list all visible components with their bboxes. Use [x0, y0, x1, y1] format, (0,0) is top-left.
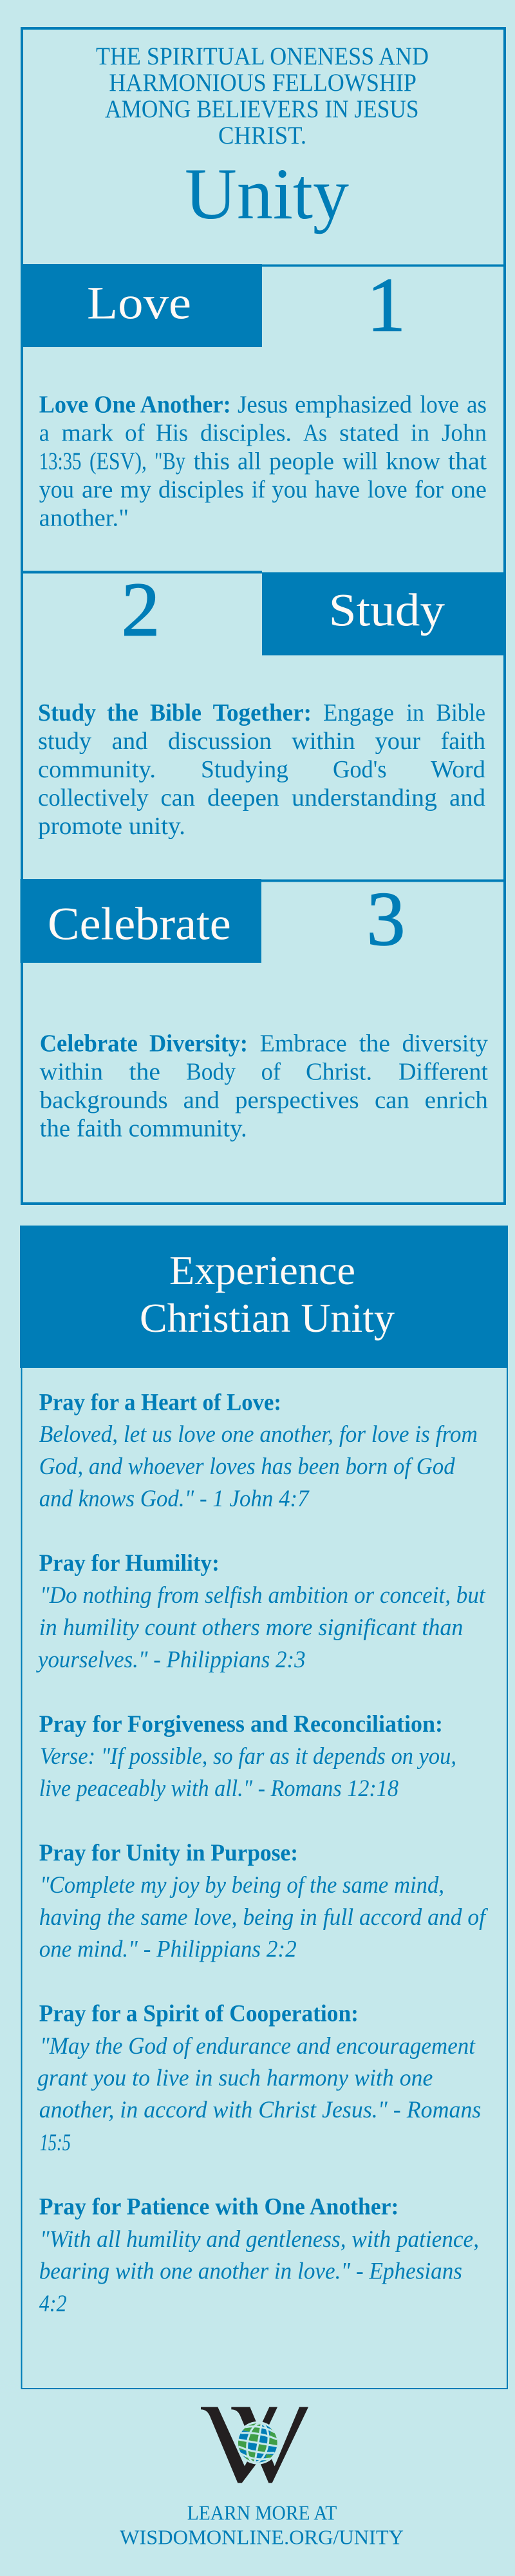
subtitle: AMONG BELIEVERS IN JESUS: [105, 95, 418, 123]
text block: Celebrate Diversity: can: [375, 1087, 409, 1114]
text block: Study the Bible Together: and: [449, 784, 485, 811]
text block: Study the Bible Together: within: [292, 728, 355, 755]
text block: Celebrate Diversity: perspectives: [235, 1087, 359, 1114]
text block: Celebrate Diversity: Different: [398, 1058, 488, 1085]
heading banner: Christian Unity: [140, 1295, 395, 1341]
section 2 header: Study: Study: [329, 585, 445, 636]
prayer: heart of love: Beloved, let us love one another, for love is from: [39, 1421, 478, 1448]
text block: Love One Another: disciples.: [200, 420, 292, 447]
heading banner: [20, 1226, 508, 1368]
text block: Study the Bible Together: understanding: [292, 784, 437, 811]
prayer: unity in purpose: having the same love, being in full accord and of: [39, 1904, 489, 1931]
text block: Study the Bible Together: Together:: [213, 699, 312, 726]
text block: Celebrate Diversity: of: [261, 1058, 281, 1085]
section 3 header: Celebrate: Celebrate: [48, 898, 231, 949]
text block: Celebrate Diversity: Christ.: [306, 1058, 372, 1085]
prayer: patience: Pray for Patience with One Another:: [39, 2193, 398, 2220]
text block: Love One Another: people: [269, 448, 334, 475]
text block: Love One Another: John: [442, 420, 487, 447]
text block: Love One Another: you: [39, 477, 74, 504]
section 2 header: Study: [262, 572, 503, 656]
number 2: 2: [121, 567, 160, 652]
section 1 header: Love: [21, 264, 262, 347]
prayer: forgiveness and reconciliation: Pray for Forgiveness and Reconciliation:: [39, 1711, 443, 1738]
prayer: humility: Pray for Humility:: [39, 1550, 220, 1577]
prayer: spirit of cooperation: another, in accord with Christ Jesus." - Romans: [39, 2097, 481, 2123]
text block: Celebrate Diversity: the: [129, 1058, 160, 1085]
text block: Love One Another: 13:35: [39, 448, 82, 475]
text block: Study the Bible Together: Bible: [436, 699, 485, 726]
text block: Celebrate Diversity: backgrounds: [40, 1087, 168, 1114]
text block: Study the Bible Together: the: [107, 699, 138, 726]
text block: Study the Bible Together: in: [406, 699, 424, 726]
text block: Study the Bible Together: and: [112, 728, 148, 755]
text block: Study the Bible Together: Engage: [323, 699, 394, 726]
text block: Love One Another: another.": [39, 505, 129, 532]
text block: Love One Another: know: [386, 448, 441, 475]
call to action: LEARN MORE AT: [187, 2501, 337, 2524]
text block: Study the Bible Together: promote unity.: [38, 813, 185, 840]
text block: Love One Another: have: [315, 477, 360, 504]
text block: Celebrate Diversity: Celebrate: [40, 1030, 138, 1057]
text block: Study the Bible Together: Word: [431, 756, 485, 783]
panel: unity definition and steps: [21, 28, 506, 1204]
text block: Study the Bible Together: your: [375, 728, 420, 755]
prayer: spirit of cooperation: grant you to live in such harmony with one: [37, 2065, 433, 2092]
subtitle: HARMONIOUS FELLOWSHIP: [109, 69, 417, 97]
text block: Love One Another: (ESV),: [89, 448, 147, 475]
text block: Love One Another: As: [303, 420, 327, 447]
call to action: [120, 2501, 404, 2549]
text block: Love One Another: emphasized: [295, 392, 412, 419]
text block: Love One Another: [39, 392, 487, 532]
text block: Celebrate Diversity: the: [359, 1030, 390, 1057]
prayer: spirit of cooperation: Pray for a Spirit of Cooperation:: [39, 2001, 359, 2027]
prayer: forgiveness and reconciliation: [39, 1711, 456, 1802]
text block: Love One Another: for: [415, 477, 444, 504]
text block: Celebrate Diversity: Embrace: [260, 1030, 347, 1057]
prayer: unity in purpose: Pray for Unity in Purpose:: [39, 1840, 298, 1866]
number 1: 1: [367, 262, 406, 348]
prayer: humility: yourselves." - Philippians 2:3: [35, 1647, 306, 1673]
subtitle: THE SPIRITUAL ONENESS AND: [96, 43, 429, 70]
text block: Study the Bible Together: deepen: [207, 784, 279, 811]
prayer: spirit of cooperation: "May the God of endurance and encouragement: [40, 2033, 476, 2060]
prayer: humility: [35, 1550, 486, 1673]
text block: Love One Another: my: [120, 477, 151, 504]
text block: Love One Another: love: [420, 392, 459, 419]
section 3 header: Celebrate: [21, 879, 261, 963]
panel: Experience Christian Unity prayers: [20, 1226, 508, 2389]
text block: Love One Another: you: [272, 477, 308, 504]
text block: Love One Another: love: [368, 477, 407, 504]
text block: Love One Another: if: [252, 477, 265, 504]
text block: Study the Bible Together: [38, 699, 485, 840]
number 3: 3: [367, 876, 406, 961]
prayer: heart of love: and knows God." - 1 John 4:7: [39, 1486, 310, 1512]
prayer: patience: bearing with one another in love." - Ephesians: [39, 2259, 462, 2285]
text block: Study the Bible Together: can: [161, 784, 195, 811]
text block: Celebrate Diversity: enrich: [425, 1087, 488, 1114]
text block: Love One Another: will: [342, 448, 378, 475]
prayer: unity in purpose: "Complete my joy by being of the same mind,: [40, 1872, 444, 1899]
prayer: spirit of cooperation: [37, 2001, 481, 2156]
text block: Study the Bible Together: study: [38, 728, 91, 755]
text block: Study the Bible Together: discussion: [168, 728, 272, 755]
text block: Study the Bible Together: Bible: [150, 699, 201, 726]
text block: Celebrate Diversity: Diversity:: [149, 1030, 248, 1057]
text block: Love One Another: that: [448, 448, 487, 475]
text block: Study the Bible Together: God's: [333, 756, 386, 783]
prayer: heart of love: [39, 1390, 478, 1512]
text block: Love One Another: of: [125, 420, 145, 447]
text block: Love One Another: stated: [339, 420, 399, 447]
text block: Love One Another: one: [451, 477, 487, 504]
text block: Love One Another: a: [39, 420, 50, 447]
text block: Study the Bible Together: collectively: [38, 784, 149, 811]
icon: Wisdom Online W logo with globe: [201, 2407, 308, 2483]
text block: Love One Another: Jesus: [238, 392, 288, 419]
text block: Love One Another: mark: [61, 420, 113, 447]
prayer: patience: 4:2: [39, 2291, 67, 2317]
text block: Celebrate Diversity: [40, 1030, 488, 1142]
prayer: forgiveness and reconciliation: live peaceably with all." - Romans 12:18: [39, 1776, 398, 1802]
text block: Celebrate Diversity: the faith community.: [40, 1115, 247, 1142]
prayer: spirit of cooperation: 15:5: [40, 2130, 71, 2156]
text block: Love One Another: as: [467, 392, 487, 419]
prayer: unity in purpose: one mind." - Philippians 2:2: [39, 1936, 297, 1963]
text block: Study the Bible Together: Study: [38, 699, 96, 726]
text block: Study the Bible Together: community.: [38, 756, 156, 783]
text block: Celebrate Diversity: diversity: [402, 1030, 488, 1057]
title: Unity: [185, 154, 349, 234]
call to action: WISDOMONLINE.ORG/UNITY: [120, 2526, 404, 2549]
text block: Love One Another: are: [82, 477, 113, 504]
prayer: humility: "Do nothing from selfish ambition or conceit, but: [40, 1582, 486, 1609]
text block: Love One Another: Love One Another:: [39, 392, 231, 419]
prayer: unity in purpose: [39, 1840, 489, 1963]
text block: Celebrate Diversity: within: [40, 1058, 103, 1085]
subtitle: CHRIST.: [218, 122, 306, 149]
text block: Study the Bible Together: Studying: [201, 756, 288, 783]
text block: Love One Another: "By: [154, 448, 185, 475]
prayer: patience: "With all humility and gentleness, with patience,: [40, 2226, 479, 2253]
text block: Love One Another: in: [411, 420, 429, 447]
heading banner: Experience: [169, 1247, 355, 1293]
prayer: forgiveness and reconciliation: Verse: "If possible, so far as it depends on you,: [40, 1743, 456, 1770]
section 1 header: Love: Love: [87, 278, 191, 329]
subtitle: [96, 43, 429, 149]
text block: Study the Bible Together: faith: [441, 728, 485, 755]
text block: Celebrate Diversity: Body: [186, 1058, 236, 1085]
text block: Love One Another: this: [193, 448, 230, 475]
prayer: heart of love: Pray for a Heart of Love:: [39, 1390, 281, 1416]
prayer: patience: [39, 2193, 479, 2317]
text block: Love One Another: all: [238, 448, 261, 475]
text block: Love One Another: disciples: [158, 477, 244, 504]
prayer: humility: in humility count others more significant than: [39, 1615, 463, 1641]
prayer: heart of love: God, and whoever loves has been born of God: [39, 1454, 455, 1480]
text block: Celebrate Diversity: and: [183, 1087, 220, 1114]
text block: Love One Another: His: [156, 420, 188, 447]
